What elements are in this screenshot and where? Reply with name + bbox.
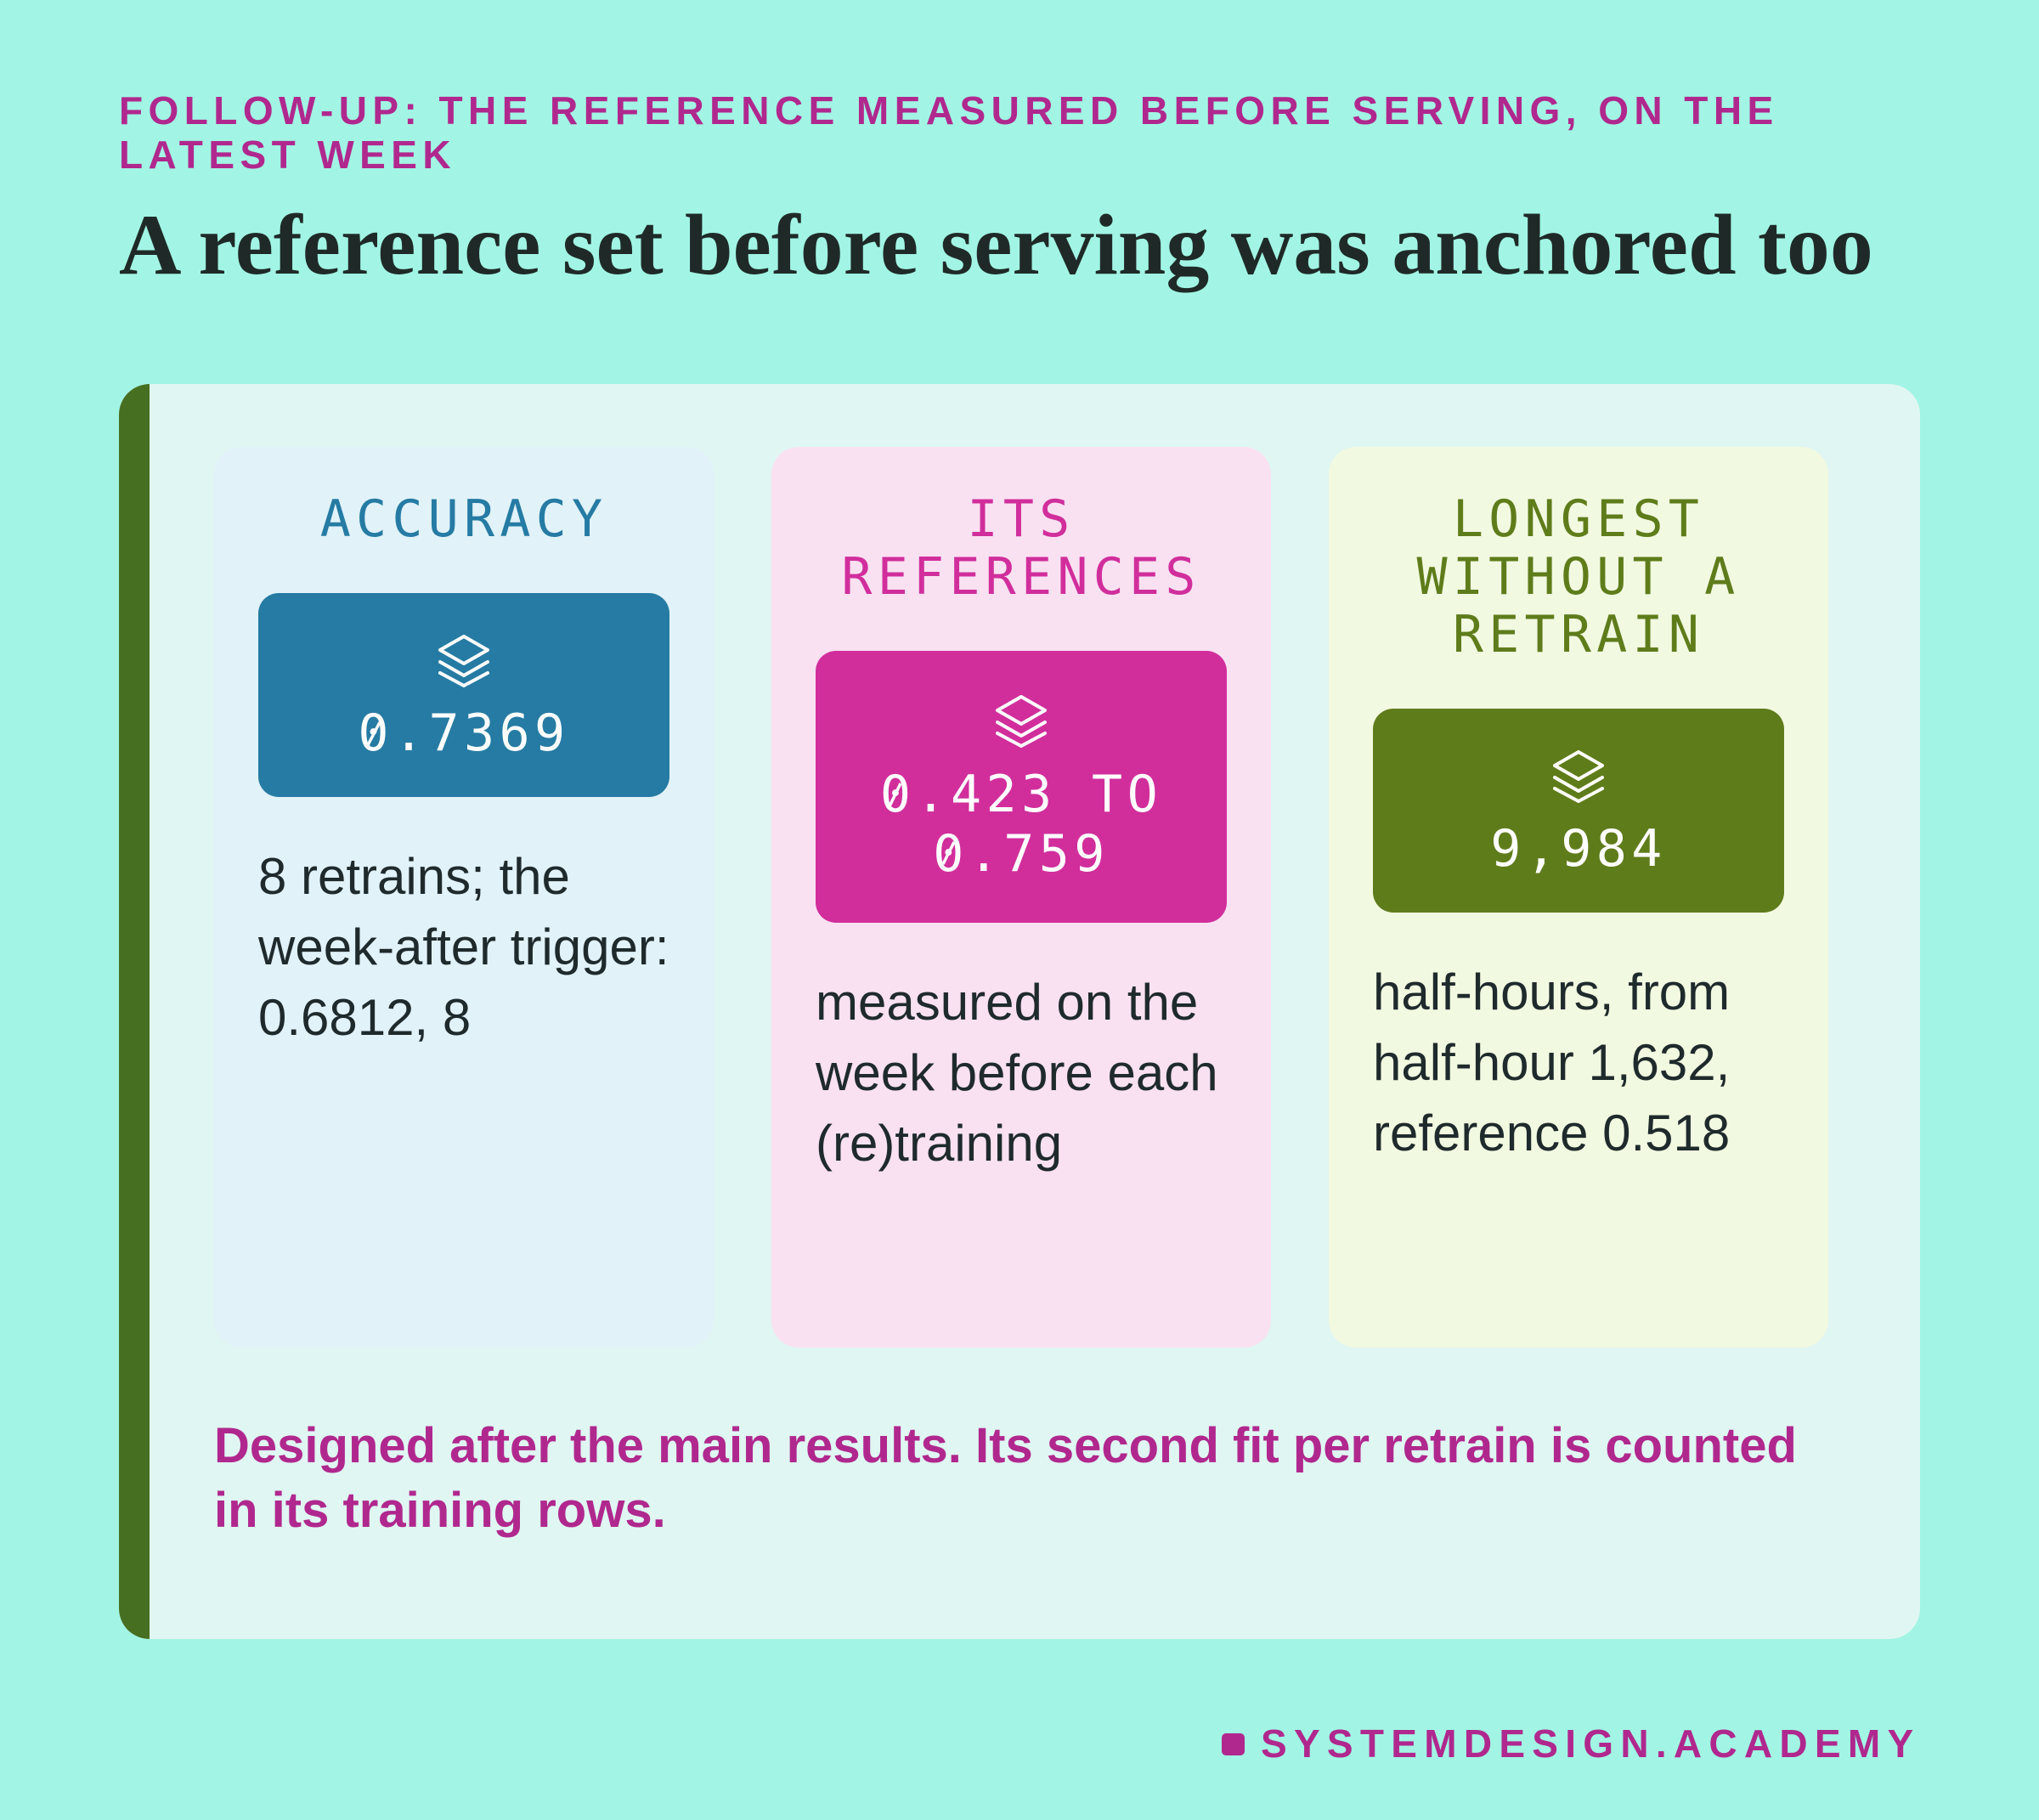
card: accuracy — [214, 447, 714, 1348]
body text: longest without a retrain: half-hour 1,632, — [1373, 1034, 1730, 1091]
card: longest without a retrain — [1329, 447, 1828, 1348]
value: references — [880, 765, 1162, 884]
eyebrow: LATEST WEEK — [119, 133, 456, 177]
footnote — [214, 1418, 1797, 1538]
footnote: Designed after the main results. Its second fit per retrain is counted — [214, 1418, 1797, 1473]
value box: longest without a retrain — [1373, 709, 1784, 913]
card label: longest without a retrain: LONGEST — [1453, 489, 1704, 549]
card label: longest without a retrain — [1417, 489, 1740, 664]
body text: references — [816, 974, 1218, 1172]
value box: accuracy — [258, 593, 669, 797]
value: references: 0.759 — [933, 824, 1110, 884]
body text: references: (re)training — [816, 1115, 1062, 1172]
card label: longest without a retrain: WITHOUT A — [1417, 547, 1740, 607]
eyebrow — [119, 88, 1779, 177]
accent bar — [119, 384, 150, 1639]
icon: layers — [438, 635, 489, 687]
panel: main — [119, 384, 1920, 1639]
value: longest without a retrain: 9,984 — [1490, 819, 1667, 879]
body text: references: week before each — [816, 1044, 1218, 1101]
body text: references: measured on the — [816, 974, 1198, 1031]
body text: accuracy: 0.6812, 8 — [258, 989, 471, 1046]
card label: references — [841, 489, 1201, 607]
card: references — [771, 447, 1271, 1348]
footnote: in its training rows. — [214, 1483, 666, 1538]
body text: accuracy: 8 retrains; the — [258, 848, 570, 905]
icon: layers — [996, 695, 1047, 748]
body text: accuracy — [258, 848, 669, 1046]
title: A reference set before serving was anchored too — [119, 197, 1873, 293]
card label: references: ITS — [967, 489, 1075, 549]
card label: accuracy: ACCURACY — [320, 489, 607, 549]
value: references: 0.423 TO — [880, 765, 1162, 824]
body text: accuracy: week-after trigger: — [258, 918, 669, 975]
eyebrow: FOLLOW-UP: THE REFERENCE MEASURED BEFORE SERVING, ON THE — [119, 88, 1779, 133]
body text: longest without a retrain: half-hours, from — [1373, 964, 1730, 1020]
icon: layers — [1553, 750, 1604, 803]
brand square — [1222, 1733, 1245, 1755]
brand footer — [1222, 1721, 1920, 1766]
body text: longest without a retrain: reference 0.518 — [1373, 1105, 1730, 1162]
value box: references — [816, 651, 1227, 923]
body text: longest without a retrain — [1373, 964, 1730, 1162]
brand name: SYSTEMDESIGN.ACADEMY — [1261, 1721, 1920, 1766]
value: accuracy: 0.7369 — [358, 704, 570, 763]
card label: longest without a retrain: RETRAIN — [1453, 605, 1704, 664]
card label: references: REFERENCES — [841, 547, 1201, 607]
